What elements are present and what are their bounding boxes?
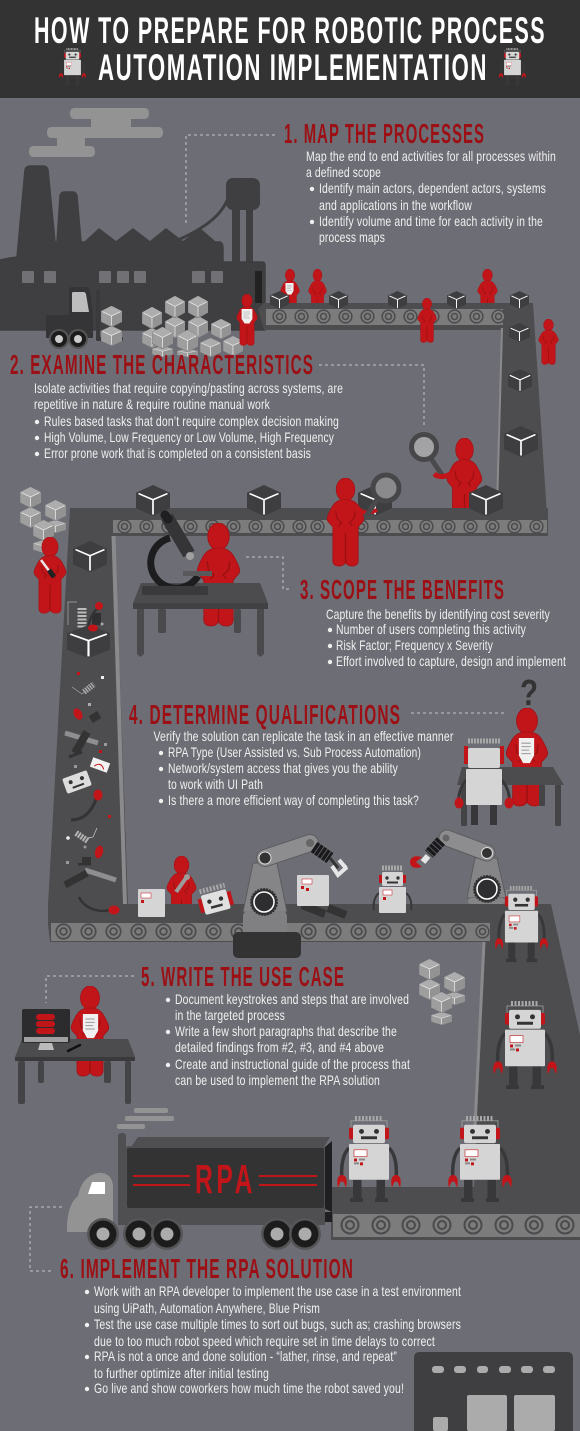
- microscope table: [133, 583, 268, 657]
- text block 6: due to too much robot speed which require set in time delays to correct: [94, 1333, 435, 1349]
- open box with falling parts: [67, 602, 110, 658]
- text block 5: [166, 991, 410, 1088]
- person reading with question mark: ?: [520, 672, 538, 713]
- text block 5: in the targeted process: [175, 1007, 285, 1023]
- text block 2: Isolate activities that require copying/pasting across systems, are: [34, 380, 343, 396]
- truck wheels: [87, 1218, 321, 1250]
- text block 1: a defined scope: [306, 164, 381, 180]
- robot without legs under arm: [374, 868, 411, 913]
- text block 1: process maps: [319, 229, 385, 245]
- text block 1: [306, 148, 556, 245]
- person with screwdriver: [34, 537, 66, 613]
- heading 2: 2. EXAMINE THE CHARACTERISTICS: [10, 349, 314, 380]
- text block 4: Network/system access that gives you the ability: [168, 760, 398, 776]
- truck smoke: [117, 1108, 174, 1129]
- truck: [67, 1133, 332, 1235]
- icon: title robot left: [59, 49, 86, 85]
- robot arm 1: [233, 839, 347, 958]
- text block 4: Is there a more efficient way of completing this task?: [168, 792, 419, 808]
- text block 1: and applications in the workflow: [319, 197, 473, 213]
- cubes top left: [20, 487, 66, 553]
- text block 5: Write a few short paragraphs that describe the: [175, 1023, 397, 1039]
- cubes by section 5: [419, 959, 465, 1025]
- text block 6: RPA is not a once and done solution - “lather, rinse, and repeat”: [94, 1348, 397, 1364]
- robot on belt 4 right: [448, 1118, 512, 1202]
- text block 5: detailed findings from #2, #3, and #4 above: [175, 1039, 384, 1055]
- text block 2: Rules based tasks that don’t require complex decision making: [44, 413, 339, 429]
- person with wrench, behind belt 3: [167, 856, 196, 925]
- building bottom right: [414, 1352, 573, 1431]
- person with paper at factory: [237, 294, 257, 345]
- text block 5: Create and instructional guide of the process that: [175, 1056, 410, 1072]
- factory: [0, 166, 265, 330]
- person with magnifier, upper, behind belt 2: [412, 434, 482, 527]
- text block 4: [154, 728, 454, 808]
- truck: RPA: [195, 1156, 256, 1202]
- text block 6: using UiPath, Automation Anywhere, Blue Prism: [94, 1300, 320, 1316]
- conveyor 2 and left column: [48, 508, 548, 925]
- falling parts on left column: [62, 672, 120, 914]
- robot body on workbench with legs: [297, 875, 346, 915]
- text block 4: Verify the solution can replicate the task in an effective manner: [154, 728, 454, 744]
- forklift: [46, 287, 123, 349]
- boxes on conveyor 2: [136, 485, 503, 516]
- table with robot seen from behind: [454, 741, 564, 826]
- conveyor 3, right column and conveyor 4: [48, 904, 580, 1240]
- text block 6: Work with an RPA developer to implement the use case in a test environment: [94, 1283, 461, 1299]
- microscope: [142, 515, 212, 595]
- desk with person and monitor: [15, 986, 135, 1104]
- conveyor 1: [258, 303, 548, 530]
- robot body on belt: [138, 889, 165, 917]
- heading 5: 5. WRITE THE USE CASE: [141, 961, 345, 992]
- water tower: [178, 178, 260, 265]
- person at microscope: [197, 523, 240, 626]
- heading 6: 6. IMPLEMENT THE RPA SOLUTION: [60, 1253, 354, 1284]
- text block 6: Go live and show coworkers how much time the robot saved you!: [94, 1380, 404, 1396]
- people behind belt 1: [281, 269, 497, 317]
- text block 6: to further optimize after initial testing: [94, 1365, 269, 1381]
- smoke cloud: [29, 108, 163, 157]
- robot standing on right column: [495, 888, 548, 962]
- person reading with question mark: [506, 672, 548, 806]
- icon: title robot right: [499, 49, 526, 85]
- text block 3: Risk Factor; Frequency x Severity: [336, 637, 493, 653]
- title: [34, 10, 546, 88]
- robot on belt 4 left: [337, 1118, 401, 1202]
- boxes on conveyor 1: [270, 291, 538, 457]
- text block 2: Error prone work that is completed on a consistent basis: [44, 445, 311, 461]
- text block 5: Document keystrokes and steps that are involved: [175, 991, 409, 1007]
- text block 6: Test the use case multiple times to sort out bugs, such as; crashing browsers: [94, 1316, 461, 1332]
- person on conveyor 1: [418, 298, 436, 343]
- text block 2: repetitive in nature & require routine manual work: [34, 396, 271, 412]
- text block 5: can be used to implement the RPA solution: [175, 1072, 380, 1088]
- text block 4: RPA Type (User Assisted vs. Sub Process Automation): [168, 744, 421, 760]
- text block 2: High Volume, Low Frequency or Low Volume, High Frequency: [44, 429, 334, 445]
- text block 2: [34, 380, 343, 461]
- box on left column: [73, 541, 107, 572]
- header band: [0, 0, 580, 98]
- robot head on belt: [196, 884, 235, 916]
- person at side of conveyor 1: [539, 319, 558, 365]
- text block 6: [85, 1283, 461, 1396]
- person with magnifier, lower: [327, 475, 399, 566]
- text block 3: [326, 606, 566, 669]
- robot on right column: [493, 1003, 557, 1089]
- factory cubes: [142, 296, 243, 357]
- robot arm 2: [410, 834, 506, 904]
- connector lines: [30, 135, 506, 1271]
- text block 4: to work with UI Path: [168, 776, 263, 792]
